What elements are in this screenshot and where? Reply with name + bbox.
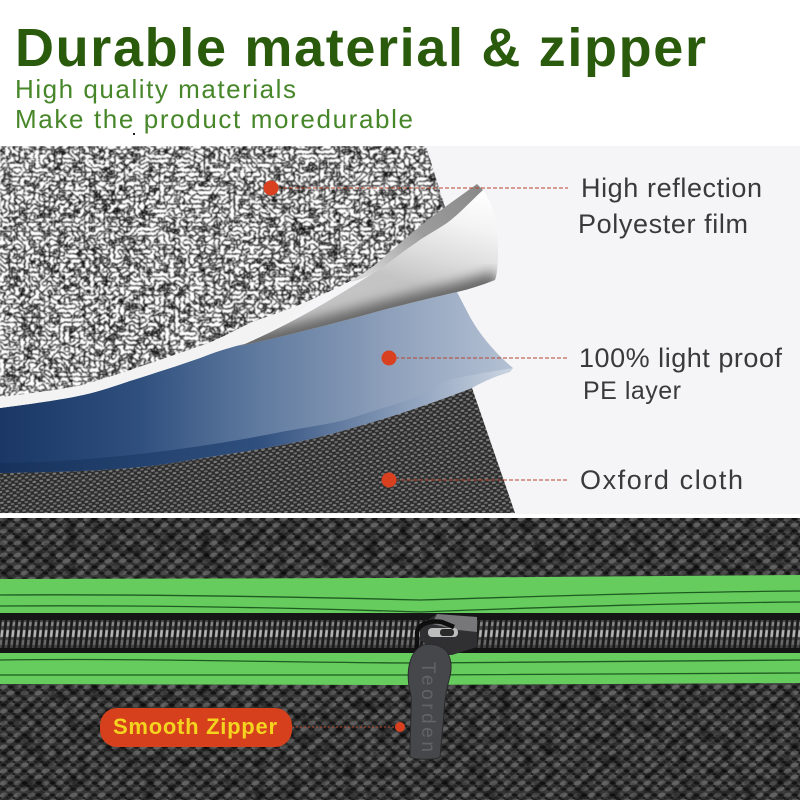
green tape [0, 575, 800, 685]
zipper pull tab: Teorden [417, 662, 438, 752]
subtitle: High quality materials [15, 74, 296, 104]
callout: smooth zipper [100, 708, 405, 747]
callout: high reflection polyester film: High reflection [581, 173, 762, 203]
panel background [0, 146, 800, 514]
subtitle: Make the product moredurable [15, 104, 413, 134]
zipper slider [417, 614, 477, 655]
panel: material layers [0, 146, 800, 514]
layer: oxford cloth [0, 388, 515, 513]
layer: PE blue film [0, 292, 513, 473]
callout: light proof PE layer: 100% light proof [579, 343, 782, 373]
tape stitching [0, 591, 800, 675]
callout: light proof PE layer [382, 343, 782, 405]
white film edge [0, 297, 317, 408]
zipper coil [0, 613, 800, 653]
title: Durable material & zipper [15, 18, 706, 78]
callout: smooth zipper: Smooth Zipper [113, 714, 277, 739]
callout: light proof PE layer: PE layer [583, 377, 681, 405]
zipper pull tab [408, 644, 451, 759]
callout: high reflection polyester film [264, 173, 762, 239]
cloth background [0, 518, 800, 800]
layer: reflective foil texture [0, 146, 450, 406]
subtitle [15, 74, 413, 134]
callout: high reflection polyester film: Polyester film [578, 209, 748, 239]
callout: oxford cloth: Oxford cloth [580, 465, 743, 495]
panel: zipper close-up [0, 518, 800, 800]
layer: curled reflective film [235, 184, 498, 350]
callout: oxford cloth [382, 465, 743, 495]
